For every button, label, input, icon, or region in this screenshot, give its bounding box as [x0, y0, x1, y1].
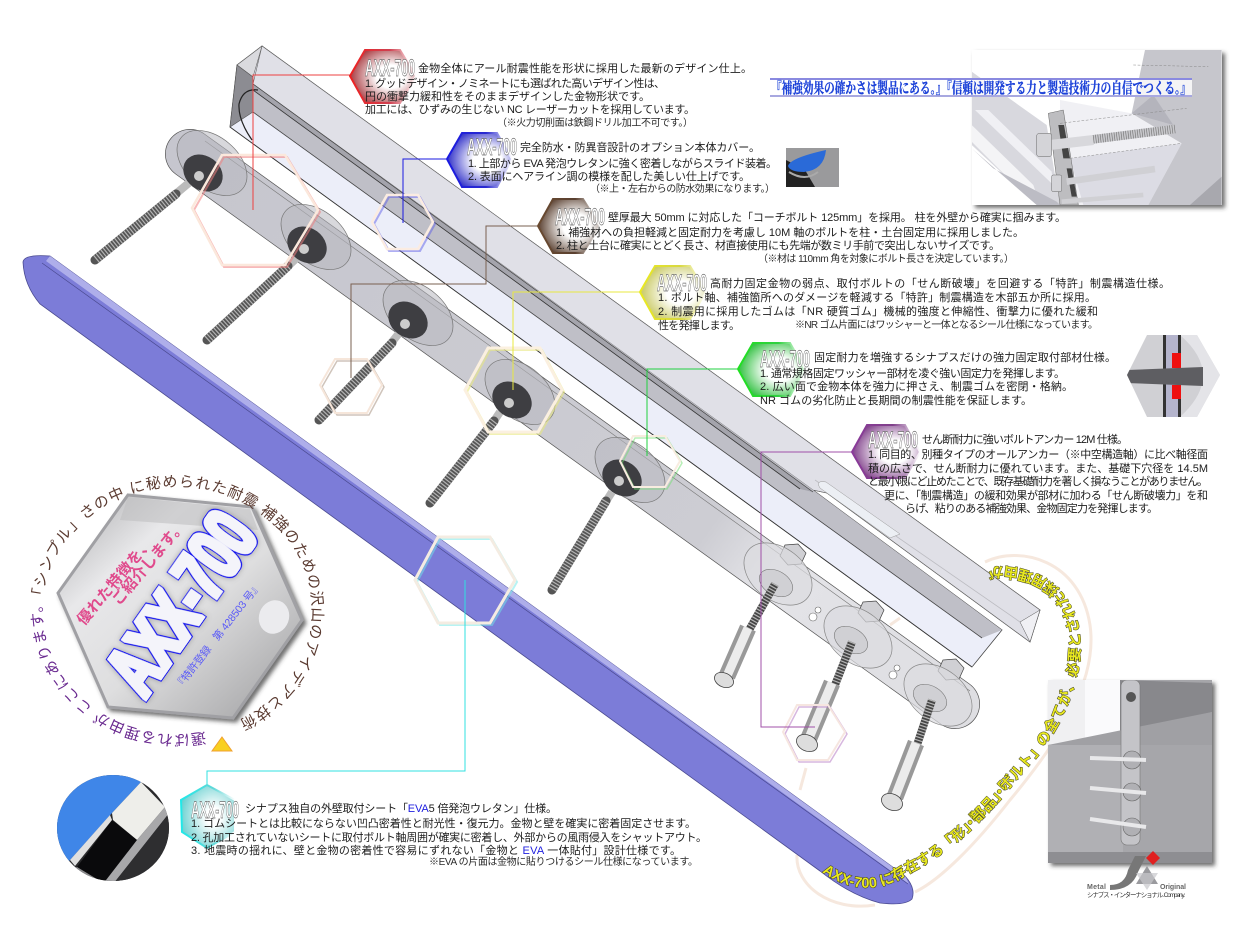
- leader line cyan: [207, 580, 465, 785]
- badge red: [350, 50, 416, 103]
- callout 6: anchor: らげ、粘りのある補強効果、金物固定力を発揮します。: [905, 501, 1158, 515]
- callout 3: coach bolt: [538, 199, 1066, 265]
- bolt 1 with washer: [95, 117, 259, 260]
- callout 1: design: （※火力切削面は鉄鋼ドリル加工不可です。）: [497, 116, 693, 129]
- callout 4: patent damping: 性を発揮します。: [658, 318, 740, 332]
- callout 4: patent damping: ※NR ゴム片面にはワッシャーと一体となるシール仕様になっています。: [795, 318, 1098, 331]
- callout 1: design: 円の衝撃力緩和性をそのままデザインした金物形状です。: [365, 89, 650, 103]
- hex marker cyan: [415, 537, 517, 625]
- callout 7: EVA sheet: 2. 孔加工されていないシートに取付ボルト軸周囲が確実に密着し、外部からの風雨侵入をシャットアウト。: [191, 830, 707, 844]
- icon: warning triangle: [212, 737, 232, 751]
- callout 5: washer: [738, 343, 1116, 407]
- hex diagram: washer cross-section: [1127, 335, 1220, 417]
- badge cyan: [181, 785, 235, 848]
- leader line purple: [761, 452, 852, 727]
- callout 5: washer: 固定耐力を増強するシナプスだけの強力固定取付部材仕様。: [814, 350, 1116, 364]
- callout 2: cover: 完全防水・防異音設計のオプション本体カバー。: [520, 140, 760, 154]
- hex marker yellow: [465, 348, 564, 434]
- callout 2: cover: 2. 表面にヘアライン調の模様を配した美しい仕上げです。: [468, 169, 750, 183]
- angle channel cover: [230, 46, 1040, 667]
- hex marker brown: [320, 359, 384, 415]
- callout 5: washer: 2. 広い面で金物本体を強力に押さえ、制震ゴムを密閉・格納。: [760, 379, 1073, 393]
- callout 4: patent damping: [640, 266, 1170, 332]
- callout 5: washer: 1. 通常規格固定ワッシャー部材を凌ぐ強い固定力を発揮します。: [760, 366, 1065, 380]
- badge label: AXX-700: [657, 270, 707, 297]
- callout 2: cover: （※上・左右からの防水効果になります。）: [590, 182, 775, 195]
- callout 6: anchor: と最小限にど止めたことで、既存基礎耐力を著しく損なうことがありません。: [868, 474, 1208, 488]
- callout 6: anchor: せん断耐力に強いボルトアンカー 12M 仕様。: [922, 432, 1128, 446]
- hex marker red: [192, 155, 320, 267]
- callout 7: EVA sheet: 1. ゴムシートとは比較にならない凹凸密着性と耐光性・復元力。金物と壁を確実に密着固定させます。: [191, 816, 696, 830]
- hex marker blue: [372, 195, 435, 251]
- anchor bolt 1: [712, 530, 824, 691]
- leader line yellow: [513, 292, 640, 390]
- company logo: Original: [1160, 884, 1186, 891]
- callout 4: patent damping: 2. 制震用に採用したゴムは「NR 硬質ゴム」機械的強度と伸縮性、衝撃力に優れた緩和: [658, 304, 1098, 318]
- left hexagon badge: AXX-700: [89, 497, 274, 710]
- callout 3: coach bolt: 1. 補強材への負担軽減と固定耐力を考慮し 10M 軸のボルトを柱・土台固定用に採用しました。: [556, 225, 1024, 239]
- callout 1: design: 金物全体にアール耐震性能を形状に採用した最新のデザイン仕上。: [418, 61, 752, 75]
- anchor bolt 2: [794, 593, 904, 755]
- left hexagon badge: ご紹介します。: [108, 517, 189, 609]
- bracket plate: [190, 141, 970, 704]
- company logo: [1087, 851, 1186, 899]
- hex marker green: [620, 436, 682, 489]
- company logo: シナプス・インターナショナル. Company.: [1087, 890, 1186, 899]
- company logo: Metal: [1087, 884, 1106, 891]
- callout 6: anchor: 更に、「制震構造」の緩和効果が部材に加わる「せん断破壊力」を和: [884, 488, 1208, 502]
- badge blue: [447, 133, 512, 187]
- badge label: AXX-700: [760, 346, 810, 373]
- badge label: AXX-700: [868, 427, 918, 454]
- bolt 5 with washer: [552, 424, 677, 590]
- leader line green: [647, 369, 738, 456]
- slot in channel: [818, 482, 900, 538]
- callout 5: washer: NR ゴムの劣化防止と長期間の制震性能を保証します。: [760, 393, 1032, 407]
- badge brown: [538, 199, 600, 253]
- callout 2: cover: [447, 133, 777, 195]
- callout 6: anchor: 1. 同目的、別種タイプのオールアンカー（※中空構造軸）に比べ軸径面: [868, 447, 1208, 461]
- bolt 3 with washer: [319, 267, 465, 420]
- badge label: AXX-700: [467, 134, 517, 161]
- callout 7: EVA sheet: [181, 785, 707, 868]
- callout 2: cover: 1. 上部から EVA 発泡ウレタンに強く密着しながらスライド装着。: [468, 156, 777, 170]
- callout 3: coach bolt: （※材は 110mm 角を対象にボルト長さを決定しています。）: [758, 252, 1014, 265]
- badge purple: [852, 425, 920, 478]
- leader line red: [253, 75, 350, 210]
- callout 6: anchor: [852, 425, 1208, 515]
- photo: blue cover: [786, 148, 839, 187]
- top-right product view: [972, 50, 1222, 205]
- yellow curved slogan: AXX-700 に存在する「形」・「部品」・「ボルト」の全てが、必要とされた採用理由があります。: [822, 565, 1082, 888]
- left hexagon badge: [58, 495, 302, 718]
- leader line brown: [351, 226, 538, 378]
- callout 6: anchor: 積の広さで、せん断耐力に優れています。また、基礎下穴径を 14.5M: [868, 461, 1208, 475]
- callout 7: EVA sheet: ※EVA の片面は金物に貼りつけるシール仕様になっています。: [429, 855, 698, 868]
- channel end face: [230, 46, 262, 140]
- callout 1: design: [350, 50, 752, 129]
- callout 7: EVA sheet: AXX-700: [191, 797, 239, 824]
- hex marker purple: [783, 705, 847, 762]
- callout 7: EVA sheet: 3. 地震時の揺れに、壁と金物の密着性で容易にずれない「金物と EVA 一体貼付」設計仕様です。: [191, 843, 681, 857]
- badge green: [738, 343, 805, 396]
- bottom-right installed view: [1048, 680, 1212, 863]
- callout 7: EVA sheet: シナプス独自の外壁取付シート「EVA5 倍発泡ウレタン」仕様。: [245, 801, 557, 815]
- callout 4: patent damping: 1. ボルト軸、補強箇所へのダメージを軽減する「特許」制震構造を木部五か所に採用。: [658, 290, 1096, 304]
- badge label: AXX-700: [555, 204, 605, 231]
- purple EVA sheet strip: [23, 256, 913, 904]
- callout 3: coach bolt: 壁厚最大 50mm に対応した「コーチボルト 125mm」を採用。 柱を外壁から確実に掴みます。: [608, 210, 1066, 224]
- left hexagon badge: 優れた特徴を、: [73, 534, 156, 629]
- callout 3: coach bolt: 2. 柱と土台に確実にとどく長さ、材直接使用にも先端が数ミリ手前で突出しないサイズです。: [556, 238, 1000, 252]
- photo: EVA sheet closeup: [57, 775, 169, 881]
- callout 1: design: 加工には、ひずみの生じない NC レーザーカットを採用しています。: [365, 102, 695, 116]
- callout 4: patent damping: 高耐力固定金物の弱点、取付ボルトの「せん断破壊」を回避する「特許」制震構造仕様。: [710, 276, 1170, 290]
- callout 1: design: 1. グッドデザイン・ノミネートにも選ばれた高いデザイン性は、: [365, 76, 665, 90]
- cream loop ring behind the parts: [797, 556, 1091, 906]
- badge yellow: [640, 266, 706, 319]
- bolt 4 with washer: [430, 346, 567, 503]
- bolt 2 with washer: [207, 191, 363, 340]
- left hexagon badge: 『特許登録 第 428503 号』: [172, 580, 264, 692]
- leader line blue: [403, 159, 447, 223]
- anchor bolt 3: [879, 651, 984, 814]
- badge label: AXX-700: [365, 55, 415, 82]
